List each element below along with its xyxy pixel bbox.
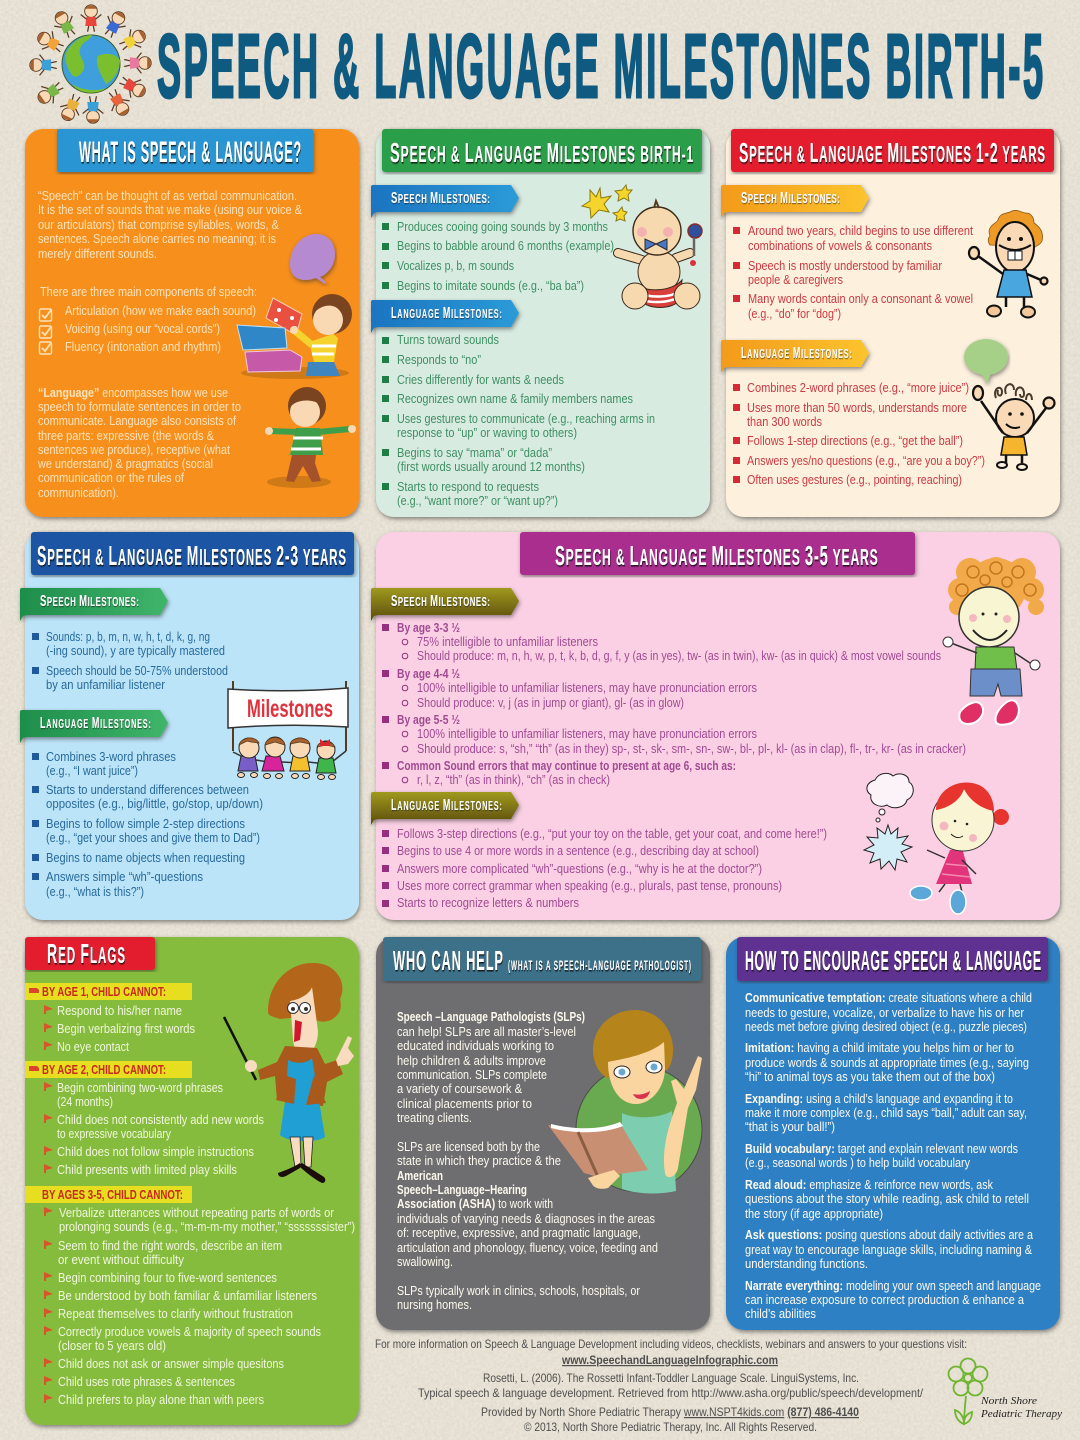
list: by ages 3-5: Child prefers to play alone than with peers: [58, 1393, 264, 1407]
list: speech milestones: By age 3-3 ½: [397, 621, 460, 635]
ribbon: speech milestones: SPEECH MILESTONES:: [741, 188, 840, 207]
list: language milestones: Starts to recognize letters & numbers: [397, 896, 579, 910]
text block: definition of language: “Language” encompasses how we use: [38, 386, 228, 400]
text block: about speech-language pathologists: nursing homes.: [397, 1298, 472, 1312]
footer: sources and contact: [375, 1337, 967, 1434]
ribbon: language milestones: LANGUAGE MILESTONES:: [741, 343, 852, 362]
text block: definition of speech: “Speech” can be thought of as verbal communication.: [38, 189, 297, 203]
list: language milestones: [382, 333, 655, 508]
text block: encouragement tips: understanding functions.: [745, 1257, 868, 1271]
list: speech milestones: 100% intelligible to unfamiliar listeners, may have pronunciation errors: [417, 681, 757, 695]
list: speech milestones: r, l, z, “th” (as in think), “ch” (as in check): [417, 773, 610, 787]
list: speech milestones: Should produce: m, n, h, w, p, t, k, b, d, g, f, y (as in yes), tw- (as in twin), kw- (as in quick) & most vowel sounds: [417, 649, 941, 663]
list: by ages 3-5: Verbalize utterances without repeating parts of words or: [59, 1206, 334, 1220]
heading: what is speech & language: [57, 129, 313, 172]
panel: what is speech & language: [25, 129, 359, 517]
footer: sources and contact: Typical speech & language development. Retrieved from http://www.asha.org/public/speech/development/: [418, 1386, 924, 1400]
list: speech milestones: Common Sound errors that may continue to present at age 6, such as:: [397, 759, 736, 773]
list: by ages 3-5: Seem to find the right words, describe an item: [58, 1239, 282, 1253]
heading: 3-5 years: [520, 532, 915, 575]
list: language milestones: Combines 3-word phrases: [46, 750, 176, 764]
illustration: boy in striped shirt: [265, 387, 356, 488]
list: language milestones: Uses gestures to communicate (e.g., reaching arms in: [397, 412, 655, 426]
list: speech milestones: Produces cooing going sounds by 3 months: [397, 220, 608, 234]
text block: definition of language: communicate. Language also consists of: [38, 414, 236, 428]
list: by ages 3-5: (closer to 5 years old): [58, 1339, 166, 1353]
list: by age 1: Respond to his/her name: [57, 1004, 182, 1018]
label: by age 1: BY AGE 1, CHILD CANNOT:: [42, 985, 166, 999]
list: by age 2: Child presents with limited play skills: [57, 1163, 237, 1177]
illustration: girl with curly hair: [973, 384, 1054, 470]
list: by age 2: to expressive vocabulary: [57, 1127, 172, 1141]
panel: red flags: [25, 937, 359, 1425]
label: by age 2: [25, 1061, 192, 1078]
list: language milestones: [32, 750, 263, 899]
text block: encouragement tips: (e.g., seasonal words ) to help build vocabulary: [745, 1156, 971, 1170]
text block: three components of speech: [40, 285, 257, 354]
ribbon: speech milestones: [721, 185, 869, 218]
text block: encouragement tips: Build vocabulary: target and explain relevant new words: [745, 1142, 1018, 1156]
label: by ages 3-5: BY AGES 3-5, CHILD CANNOT:: [42, 1188, 183, 1202]
list: by ages 3-5: Begin combining four to five-word sentences: [58, 1271, 277, 1285]
list: language milestones: Combines 2-word phrases (e.g., “more juice”): [747, 381, 969, 395]
list: speech milestones: people & caregivers: [748, 273, 843, 287]
list: language milestones: Follows 3-step directions (e.g., “put your toy on the table, get your coat, and come here!”): [397, 827, 827, 841]
text block: three components of speech: There are three main components of speech:: [40, 285, 257, 299]
illustration: boy with orange hair: [969, 210, 1048, 318]
text block: about speech-language pathologists: Speech –Language Pathologists (SLPs): [397, 1010, 585, 1024]
ribbon: speech milestones: [371, 185, 519, 218]
list: speech milestones: [382, 621, 966, 787]
heading: how to encourage: HOW TO ENCOURAGE SPEECH & LANGUAGE: [745, 944, 1041, 976]
text block: encouragement tips: produce words & sounds at appropriate times (e.g., saying: [745, 1056, 1029, 1070]
footer: sources and contact: Provided by North Shore Pediatric Therapy www.NSPT4kids.com (877) 486-4140: [481, 1405, 859, 1419]
heading: who can help: [383, 937, 701, 981]
text block: definition of speech: sentences. Speech alone carries no meaning; it is: [38, 232, 276, 246]
list: by ages 3-5: [44, 1206, 355, 1407]
text block: about speech-language pathologists: can help! SLPs are all master’s-level: [397, 1025, 576, 1039]
list: by ages 3-5: Child does not ask or answer simple quesitons: [58, 1357, 284, 1371]
list: language milestones: than 300 words: [747, 415, 822, 429]
list: language milestones: (e.g., “want more?” or “want up?”): [397, 494, 558, 508]
panel: milestones 1-2 years: [721, 129, 1060, 517]
text block: definition of language: communication).: [38, 486, 119, 500]
list: speech milestones: combinations of vowels & consonants: [748, 239, 932, 253]
text block: encouragement tips: great way to encourage language skills, including naming &: [745, 1243, 1033, 1257]
list: language milestones: (e.g., “I want juice”): [46, 764, 138, 778]
ribbon: language milestones: LANGUAGE MILESTONES:: [391, 303, 502, 322]
ribbon: language milestones: LANGUAGE MILESTONES:: [391, 795, 502, 814]
icon: thought and spiky speech bubbles: [864, 773, 913, 870]
illustration: teacher with pointer: [224, 963, 354, 1183]
text block: encouragement tips: Expanding: using a child’s language and expanding it to: [745, 1092, 1013, 1106]
text block: about speech-language pathologists: swallowing.: [397, 1255, 453, 1269]
text block: about speech-language pathologists: American: [397, 1169, 443, 1183]
text block: encouragement tips: Ask questions: posing questions about daily activities are a: [745, 1228, 1033, 1242]
ribbon: speech milestones: SPEECH MILESTONES:: [40, 591, 139, 610]
list: speech milestones: Speech should be 50-75% understood: [46, 664, 228, 678]
list: language milestones: response to “up” or waving to others): [397, 426, 577, 440]
list: speech milestones: 75% intelligible to unfamiliar listeners: [417, 635, 598, 649]
list: speech milestones: (-ing sound), y are typically mastered: [46, 644, 225, 658]
panel: milestones 3-5 years: [371, 532, 1060, 920]
text block: definition of language: [37, 386, 241, 500]
list: by age 1: [44, 1004, 195, 1054]
icon: checkboxes: [40, 309, 52, 354]
list: speech milestones: Speech is mostly understood by familiar: [748, 259, 942, 273]
text block: about speech-language pathologists: help children & adults improve: [397, 1054, 546, 1068]
list: language milestones: Begins to name objects when requesting: [46, 851, 245, 865]
icon: green speech bubble: [964, 339, 1008, 384]
text block: three components of speech: Articulation (how we make each sound): [65, 304, 256, 318]
list: language milestones: Responds to “no”: [397, 353, 481, 367]
list: speech milestones: [382, 220, 614, 293]
text block: three components of speech: Fluency (intonation and rhythm): [65, 340, 221, 354]
heading: 1-2 years: SPEECH & LANGUAGE MILESTONES 1-2 YEARS: [739, 137, 1045, 168]
text block: encouragement tips: questions about the story while reading, ask child to retell: [745, 1192, 1029, 1206]
list: speech milestones: 100% intelligible to unfamiliar listeners, may have pronunciation errors: [417, 727, 757, 741]
list: by ages 3-5: Repeat themselves to clarify without frustration: [58, 1307, 293, 1321]
text block: definition of language: sentences we produce), receptive (what: [38, 443, 230, 457]
text block: encouragement tips: needs to gesture, vocalize, or verbalize to have his or her: [745, 1006, 1024, 1020]
illustration: milestones banner held by children: [228, 681, 348, 780]
text block: about speech-language pathologists: individuals of varying needs & diagnoses in the areas: [397, 1212, 655, 1226]
list: language milestones: Cries differently for wants & needs: [397, 373, 564, 387]
panel: milestones 2-3 years: [20, 532, 359, 920]
list: language milestones: [733, 381, 985, 487]
list: by age 2: Child does not consistently add new words: [57, 1113, 264, 1127]
illustration: child with blocks: [237, 294, 352, 379]
text block: about speech-language pathologists: treating clients.: [397, 1111, 472, 1125]
list: language milestones: Starts to respond to requests: [397, 480, 539, 494]
list: by age 2: (24 months): [57, 1095, 113, 1109]
text block: about speech-language pathologists: state in which they practice & the: [397, 1154, 561, 1168]
text block: encouragement tips: needs met before giving desired object (e.g., puzzle pieces): [745, 1020, 1027, 1034]
text block: encouragement tips: the story (if age appropriate): [745, 1207, 883, 1221]
logo: North Shore Pediatric Therapy flower: North Shore: [980, 1395, 1037, 1407]
list: speech milestones: Many words contain only a consonant & vowel: [748, 292, 973, 306]
text block: encouragement tips: make it more complex (e.g., child says “ball,” adult can say,: [745, 1106, 1027, 1120]
footer: sources and contact: Rosetti, L. (2006). The Rossetti Infant-Toddler Language Scale. LinguiSystems, Inc.: [483, 1371, 859, 1385]
ribbon: language milestones: [371, 300, 519, 333]
text block: definition of language: we understand) & pragmatics (social: [37, 457, 213, 471]
list: language milestones: opposites (e.g., big/little, go/stop, up/down): [46, 797, 263, 811]
list: by age 2: [44, 1081, 264, 1177]
text block: about speech-language pathologists: Speech–Language–Hearing: [397, 1183, 527, 1197]
text block: about speech-language pathologists: Association (ASHA) to work with: [397, 1197, 553, 1211]
list: language milestones: Uses more than 50 words, understands more: [747, 401, 967, 415]
list: speech milestones: [733, 224, 973, 321]
heading: red flags: [25, 937, 155, 970]
list: speech milestones: (e.g., “do” for “dog”): [748, 307, 841, 321]
label: by age 1: [25, 983, 192, 1000]
illustration: curly-haired boy: [943, 557, 1044, 725]
text block: definition of speech: our articulators) that comprise syllables, words, &: [38, 218, 280, 232]
heading: red flags: RED FLAGS: [47, 938, 125, 969]
ribbon: speech milestones: SPEECH MILESTONES:: [391, 188, 490, 207]
list: language milestones: Begins to follow simple 2-step directions: [46, 817, 245, 831]
text block: encouragement tips: Narrate everything: modeling your own speech and language: [745, 1279, 1041, 1293]
list: language milestones: Answers more complicated “wh”-questions (e.g., “why is he at the doctor?”): [397, 862, 762, 876]
ribbon: speech milestones: SPEECH MILESTONES:: [391, 591, 490, 610]
label: by age 2: BY AGE 2, CHILD CANNOT:: [42, 1063, 166, 1077]
list: language milestones: Answers yes/no questions (e.g., “are you a boy?”): [747, 454, 985, 468]
text block: definition of speech: It is the set of sounds that we make (using our voice &: [38, 203, 303, 217]
text block: about speech-language pathologists: SLPs typically work in clinics, schools, hospitals, or: [397, 1284, 640, 1298]
list: by ages 3-5: Be understood by both familiar & unfamiliar listeners: [58, 1289, 317, 1303]
list: language milestones: Recognizes own name & family members names: [397, 392, 633, 406]
list: language milestones: [382, 827, 827, 910]
text block: about speech-language pathologists: a variety of coursework &: [397, 1082, 523, 1096]
list: language milestones: Answers simple “wh”-questions: [46, 870, 203, 884]
heading: 2-3 years: SPEECH & LANGUAGE MILESTONES 2-3 YEARS: [37, 540, 346, 571]
heading: 1-2 years: [731, 129, 1054, 172]
list: language milestones: Begins to use 4 or more words in a sentence (e.g., describing day at school): [397, 844, 759, 858]
icon: purple speech bubble: [290, 234, 335, 284]
illustration: milestones banner held by children: Milestones: [247, 695, 333, 723]
heading: what is speech & language: WHAT IS SPEECH & LANGUAGE?: [79, 135, 301, 169]
list: by ages 3-5: or event without difficulty: [58, 1253, 185, 1267]
text block: encouragement tips: “that is your ball!”): [745, 1120, 835, 1134]
list: by ages 3-5: Correctly produce vowels & majority of speech sounds: [58, 1325, 321, 1339]
list: speech milestones: Should produce: s, “sh,” “th” (as in they) sp-, st-, sk-, sm-, sn-, sw-, bl-, pl-, kl- (as in clap), fl-, tr-, kr- (as in cracker): [417, 742, 966, 756]
logo: North Shore Pediatric Therapy flower: Pediatric Therapy: [980, 1408, 1062, 1420]
list: speech milestones: Vocalizes p, b, m sounds: [397, 259, 514, 273]
list: language milestones: Uses more correct grammar when speaking (e.g., plurals, past tense, pronouns): [397, 879, 782, 893]
illustration: woman with book: [548, 1010, 702, 1193]
panel: how to encourage speech & language: [726, 937, 1060, 1330]
text block: about speech-language pathologists: articulation and phonology, fluency, voice, feeding and: [397, 1241, 658, 1255]
text block: about speech-language pathologists: communication. SLPs complete: [397, 1068, 547, 1082]
list: language milestones: (first words usually around 12 months): [397, 460, 585, 474]
text block: definition of language: speech to formulate sentences in order to: [38, 400, 241, 414]
text block: definition of speech: merely different sounds.: [38, 247, 157, 261]
text block: encouragement tips: [745, 991, 1041, 1321]
label: by ages 3-5: [25, 1186, 192, 1203]
text block: encouragement tips: can increase exposure to correct production & enhance a: [745, 1293, 1024, 1307]
text block: definition of language: communication or the rules of: [38, 471, 184, 485]
list: by age 2: Begin combining two-word phrases: [57, 1081, 223, 1095]
text block: encouragement tips: Read aloud: emphasize & reinforce new words, ask: [745, 1178, 994, 1192]
text block: about speech-language pathologists: of: receptive, expressive, and pragmatic language,: [397, 1226, 641, 1240]
list: by age 1: No eye contact: [57, 1040, 129, 1054]
text block: encouragement tips: Imitation: having a child imitate you helps him or her to: [745, 1041, 1014, 1055]
panel: milestones birth-1: [371, 129, 710, 517]
text block: about speech-language pathologists: [397, 1010, 658, 1312]
list: language milestones: Follows 1-step directions (e.g., “get the ball”): [747, 434, 963, 448]
title: SPEECH & LANGUAGE MILESTONES BIRTH-5: [157, 16, 1043, 117]
list: language milestones: Starts to understand differences between: [46, 783, 249, 797]
illustration: red-haired girl: [910, 783, 1009, 914]
illustration: baby with stars and rattle: [582, 185, 702, 309]
text block: definition of language: three parts: expressive (the words &: [38, 429, 215, 443]
text block: about speech-language pathologists: SLPs are licensed both by the: [397, 1140, 540, 1154]
ribbon: language milestones: [371, 792, 519, 825]
list: speech milestones: Begins to babble around 6 months (example): [397, 239, 614, 253]
list: speech milestones: Around two years, child begins to use different: [748, 224, 973, 238]
ribbon: speech milestones: [371, 588, 519, 621]
text block: encouragement tips: child’s abilities: [745, 1307, 816, 1321]
ribbon: language milestones: [721, 340, 869, 373]
list: speech milestones: By age 5-5 ½: [397, 713, 460, 727]
heading: who can help: WHO CAN HELP (WHAT IS A SPEECH-LANGUAGE PATHOLOGIST): [393, 944, 691, 976]
logo: North Shore Pediatric Therapy flower: [948, 1358, 1062, 1424]
list: speech milestones: Should produce: v, j (as in jump or giant), gl- (as in glow): [417, 696, 684, 710]
list: speech milestones: by an unfamiliar listener: [46, 678, 165, 692]
list: by ages 3-5: prolonging sounds (e.g., “m-m-m-my mother,” “sssssssister”): [59, 1220, 355, 1234]
list: speech milestones: Sounds: p, b, m, n, w, h, t, d, k, g, ng: [46, 630, 210, 644]
list: language milestones: Turns toward sounds: [397, 333, 499, 347]
icon: globe with ring of children: [30, 5, 151, 124]
footer: sources and contact: www.SpeechandLanguageInfographic.com: [561, 1353, 778, 1367]
list: speech milestones: [32, 630, 228, 692]
heading: birth-1: [382, 129, 702, 172]
text block: three components of speech: Voicing (using our “vocal cords”): [65, 322, 220, 336]
ribbon: language milestones: LANGUAGE MILESTONES:: [40, 713, 151, 732]
list: by age 1: Begin verbalizing first words: [57, 1022, 195, 1036]
panel: who can help: [376, 937, 710, 1330]
list: by age 2: Child does not follow simple instructions: [57, 1145, 254, 1159]
text block: encouragement tips: Communicative temptation: create situations where a child: [745, 991, 1032, 1005]
ribbon: speech milestones: [20, 588, 168, 621]
list: language milestones: (e.g., “get your shoes and give them to Dad”): [46, 831, 260, 845]
list: speech milestones: Begins to imitate sounds (e.g., “ba ba”): [397, 279, 584, 293]
list: by ages 3-5: Child uses rote phrases & sentences: [58, 1375, 235, 1389]
heading: birth-1: SPEECH & LANGUAGE MILESTONES BIRTH-1: [390, 137, 693, 168]
text block: about speech-language pathologists: clinical placements prior to: [397, 1097, 532, 1111]
heading: 3-5 years: SPEECH & LANGUAGE MILESTONES 3-5 YEARS: [555, 540, 878, 571]
text block: about speech-language pathologists: educated individuals working to: [397, 1039, 554, 1053]
list: language milestones: Often uses gestures (e.g., pointing, reaching): [747, 473, 962, 487]
list: speech milestones: By age 4-4 ½: [397, 667, 460, 681]
list: language milestones: (e.g., “what is this?”): [46, 885, 144, 899]
footer: sources and contact: For more information on Speech & Language Development including videos, checklists, webinars and answers to your questions visit:: [375, 1337, 967, 1351]
text block: definition of speech: [38, 189, 303, 261]
text block: encouragement tips: “hi” to animal toys as you take them out of the box): [745, 1070, 995, 1084]
list: language milestones: Begins to say “mama” or “dada”: [397, 446, 552, 460]
ribbon: language milestones: [20, 710, 168, 743]
footer: sources and contact: © 2013, North Shore Pediatric Therapy, Inc. All Rights Reserved.: [524, 1420, 817, 1434]
